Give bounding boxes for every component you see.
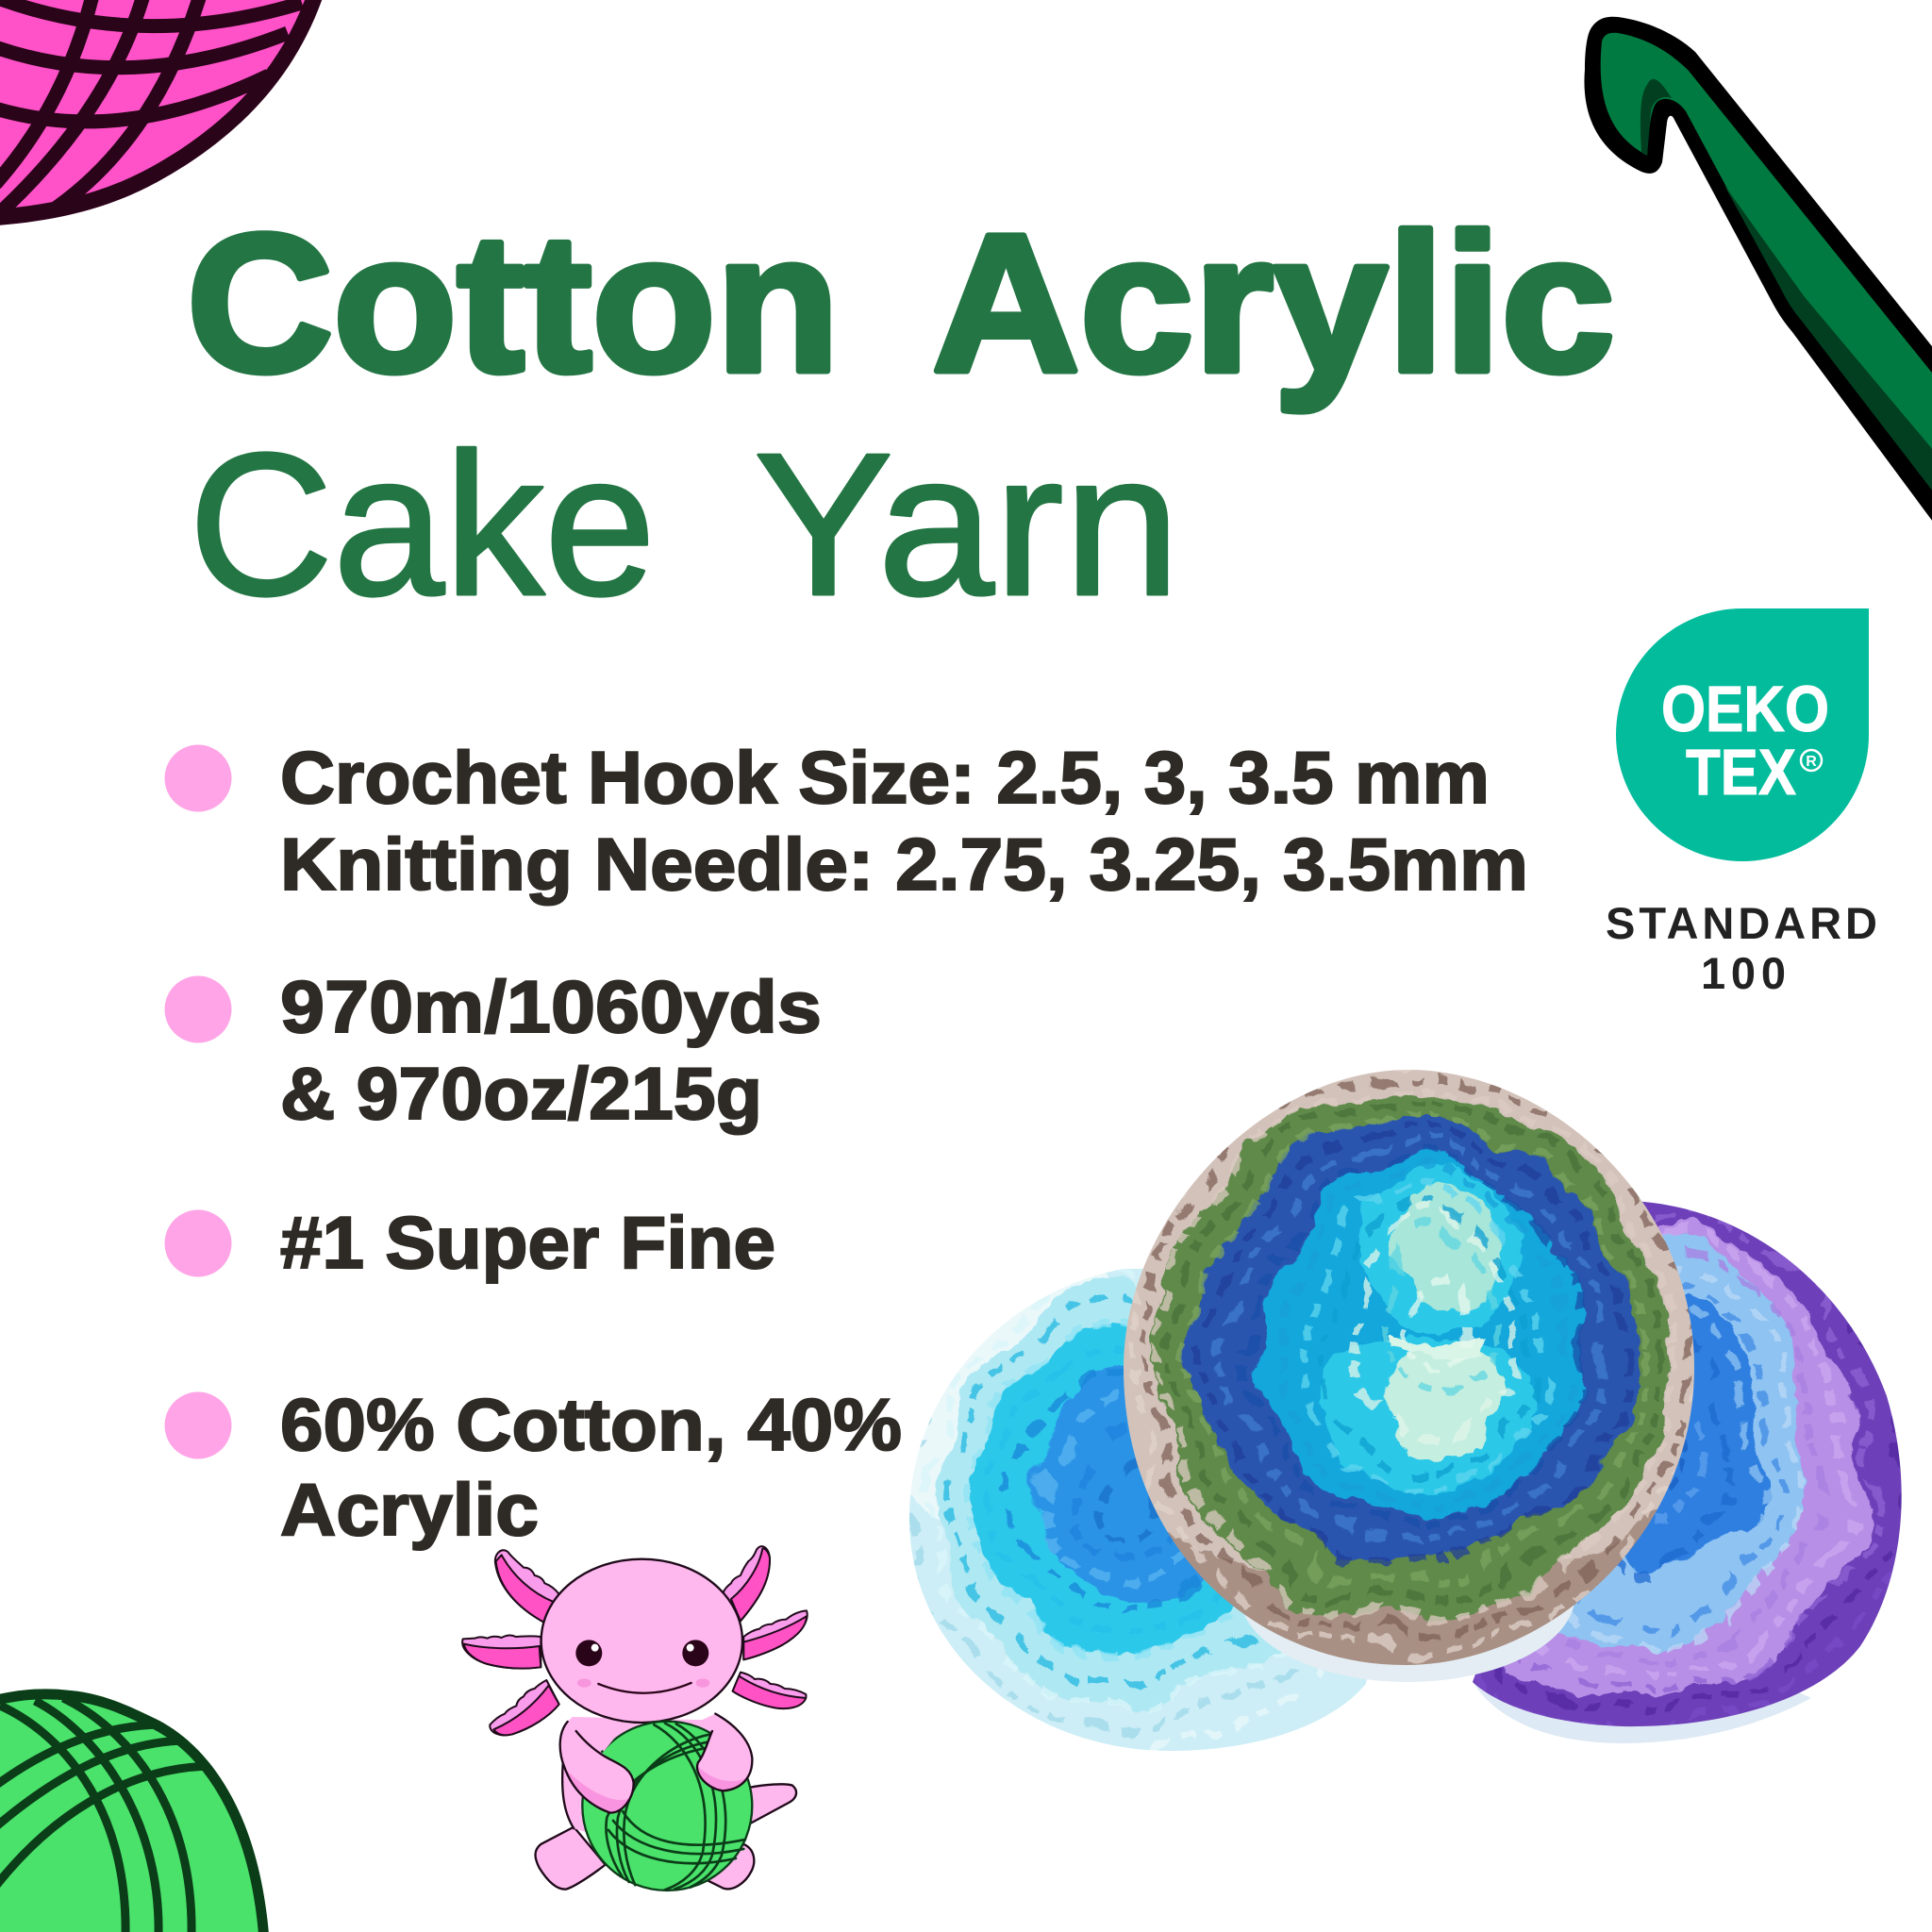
text: needle size: Knitting Needle: 2.75, 3.25, 3.5mm <box>280 823 1528 906</box>
mouth <box>598 1683 691 1693</box>
yarn cake base: centre <box>1240 1507 1575 1682</box>
axolotl left arm <box>560 1717 634 1813</box>
logo text OEKO: OEKO <box>1661 673 1829 745</box>
yarn cake: purple <box>1473 1202 1902 1726</box>
title word: Yarn: Yarn <box>754 410 1180 638</box>
panel: feature list <box>164 736 1528 1551</box>
text: length: 970m/1060yds <box>280 965 822 1048</box>
title <box>187 194 1615 638</box>
illustration: axolotl holding yarn ball <box>462 1546 808 1890</box>
icon: green yarn ball corner <box>0 1689 271 1932</box>
photo: three yarn cakes <box>909 1070 1902 1751</box>
text: STANDARD: STANDARD <box>1606 898 1877 948</box>
title word: Cotton: Cotton <box>187 194 840 413</box>
text: 100: 100 <box>1701 948 1786 998</box>
bullet 2 <box>164 975 232 1043</box>
axolotl yarn ball <box>582 1722 752 1890</box>
registered mark: R <box>1806 754 1817 770</box>
cheeks <box>577 1678 709 1688</box>
axolotl legs <box>535 1827 754 1890</box>
bullet 3 <box>164 1209 232 1277</box>
bullet 1 <box>164 745 232 811</box>
icon: pink yarn ball corner <box>0 0 340 227</box>
registered mark <box>1801 750 1822 771</box>
axolotl gills <box>462 1546 808 1735</box>
title word: Acrylic: Acrylic <box>932 194 1615 413</box>
yarn cake base: purple <box>1473 1604 1811 1743</box>
axolotl tail <box>748 1784 796 1824</box>
axolotl head <box>541 1559 742 1723</box>
icon: green crochet hook <box>1584 17 1932 536</box>
badge: OEKO-TEX Standard 100 <box>1606 608 1877 998</box>
text: weight: & 970oz/215g <box>280 1052 762 1135</box>
logo text TEX: TEX <box>1686 736 1796 808</box>
axolotl body <box>562 1717 717 1842</box>
axolotl right arm <box>695 1714 752 1790</box>
bullet 4 <box>164 1392 232 1458</box>
yarn cake: centre <box>1124 1070 1694 1665</box>
teardrop logo <box>1616 608 1869 861</box>
axolotl body outline <box>562 1764 574 1828</box>
text: hook size: Crochet Hook Size: 2.5, 3, 3.5 mm <box>280 736 1490 819</box>
eyes <box>575 1640 708 1666</box>
title word: Cake: Cake <box>189 410 656 638</box>
text: composition: 60% Cotton, 40% <box>280 1383 902 1466</box>
text: yarn grade: #1 Super Fine <box>280 1201 775 1284</box>
text: composition line 2: Acrylic <box>280 1468 539 1551</box>
yarn cake: light blue <box>909 1269 1367 1751</box>
